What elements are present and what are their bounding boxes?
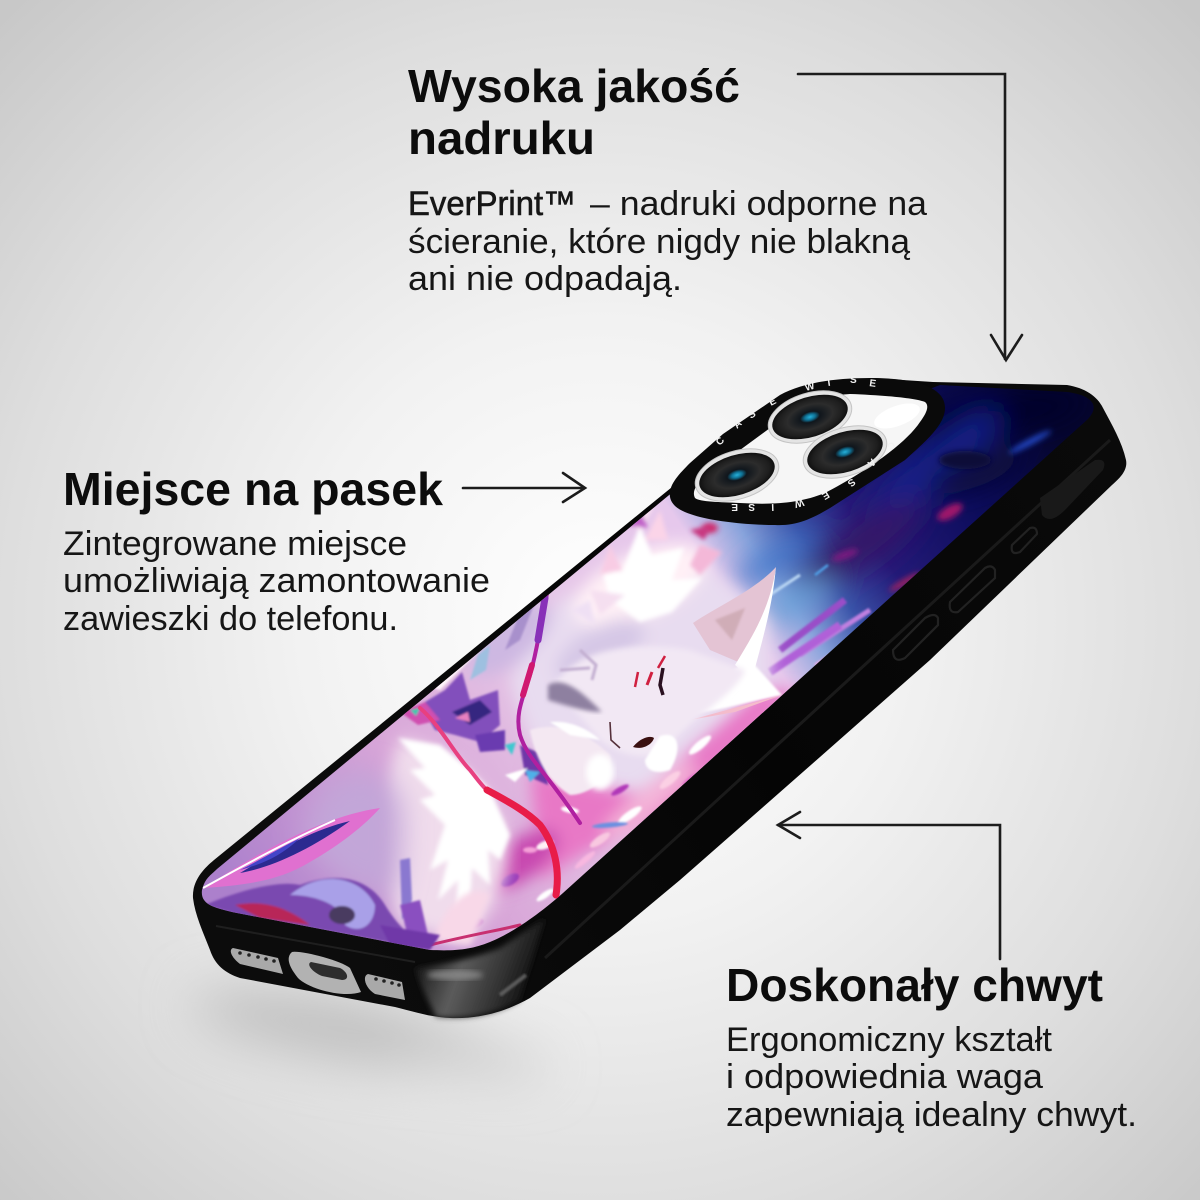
corner gloss bbox=[415, 918, 545, 1018]
crystal bbox=[203, 808, 380, 888]
tail bbox=[300, 738, 510, 945]
white flames bbox=[572, 505, 722, 625]
forehead marks bbox=[660, 668, 663, 695]
strap slot bbox=[1040, 460, 1104, 519]
description: zawieszki do telefonu. bbox=[63, 600, 398, 638]
callout: print quality bbox=[408, 60, 1022, 360]
violet foliage bbox=[400, 590, 548, 785]
night sky bbox=[722, 399, 1036, 636]
description: Ergonomiczny kształt bbox=[726, 1021, 1053, 1059]
camera window bbox=[694, 394, 927, 504]
lens top bbox=[762, 381, 858, 453]
arrow bbox=[463, 473, 585, 502]
camera module bbox=[670, 375, 945, 525]
description: zapewniają idealny chwyt. bbox=[726, 1096, 1137, 1134]
heading: Doskonały chwyt bbox=[726, 959, 1103, 1011]
gloss highlights bbox=[427, 970, 483, 980]
camera ring lettering: CASEWISE bbox=[714, 375, 877, 448]
fox eye bbox=[633, 737, 654, 748]
lens bottom bbox=[689, 439, 785, 511]
usb port bbox=[289, 952, 361, 994]
fox ear bbox=[693, 567, 782, 719]
camera ring lettering lower: CASEWISE bbox=[731, 439, 897, 512]
speaker left bbox=[231, 948, 283, 974]
nebula accents bbox=[702, 428, 1053, 594]
bottom ports bbox=[231, 948, 405, 1000]
lower left swirl bbox=[205, 858, 440, 950]
heading: Wysoka jakość bbox=[408, 60, 740, 112]
side buttons bbox=[893, 528, 1037, 660]
ribbon bbox=[420, 590, 580, 945]
heading: nadruku bbox=[408, 112, 595, 164]
description: Zintegrowane miejsce bbox=[63, 525, 407, 563]
heading: Miejsce na pasek bbox=[63, 463, 443, 515]
description: EverPrint™ bbox=[408, 185, 576, 223]
description: i odpowiednia waga bbox=[726, 1058, 1043, 1096]
camera ring bbox=[670, 378, 945, 525]
arrow bbox=[798, 74, 1022, 360]
pink glitter floor bbox=[472, 690, 800, 902]
callout: strap bbox=[63, 463, 585, 638]
light streaks bbox=[765, 565, 880, 672]
description bbox=[408, 185, 927, 298]
description: – nadruki odporne na bbox=[590, 185, 927, 223]
description bbox=[63, 525, 490, 638]
description bbox=[726, 1021, 1137, 1134]
glitter specks bbox=[476, 734, 712, 928]
lens middle bbox=[797, 416, 893, 488]
case body bbox=[193, 378, 1126, 1018]
heading bbox=[408, 60, 740, 164]
description: ani nie odpadają. bbox=[408, 260, 682, 298]
description: ścieranie, które nigdy nie blakną bbox=[408, 223, 910, 261]
printed artwork bbox=[180, 370, 1110, 970]
fox nose bbox=[610, 722, 620, 748]
arrow bbox=[778, 812, 1000, 959]
fox body bbox=[458, 526, 770, 800]
speaker right bbox=[365, 974, 405, 1000]
phone drop shadow bbox=[187, 974, 551, 1086]
description: umożliwiają zamontowanie bbox=[63, 562, 490, 600]
fox head bbox=[530, 646, 745, 795]
phone case illustration bbox=[180, 370, 1126, 1018]
callout: grip bbox=[726, 812, 1137, 1134]
